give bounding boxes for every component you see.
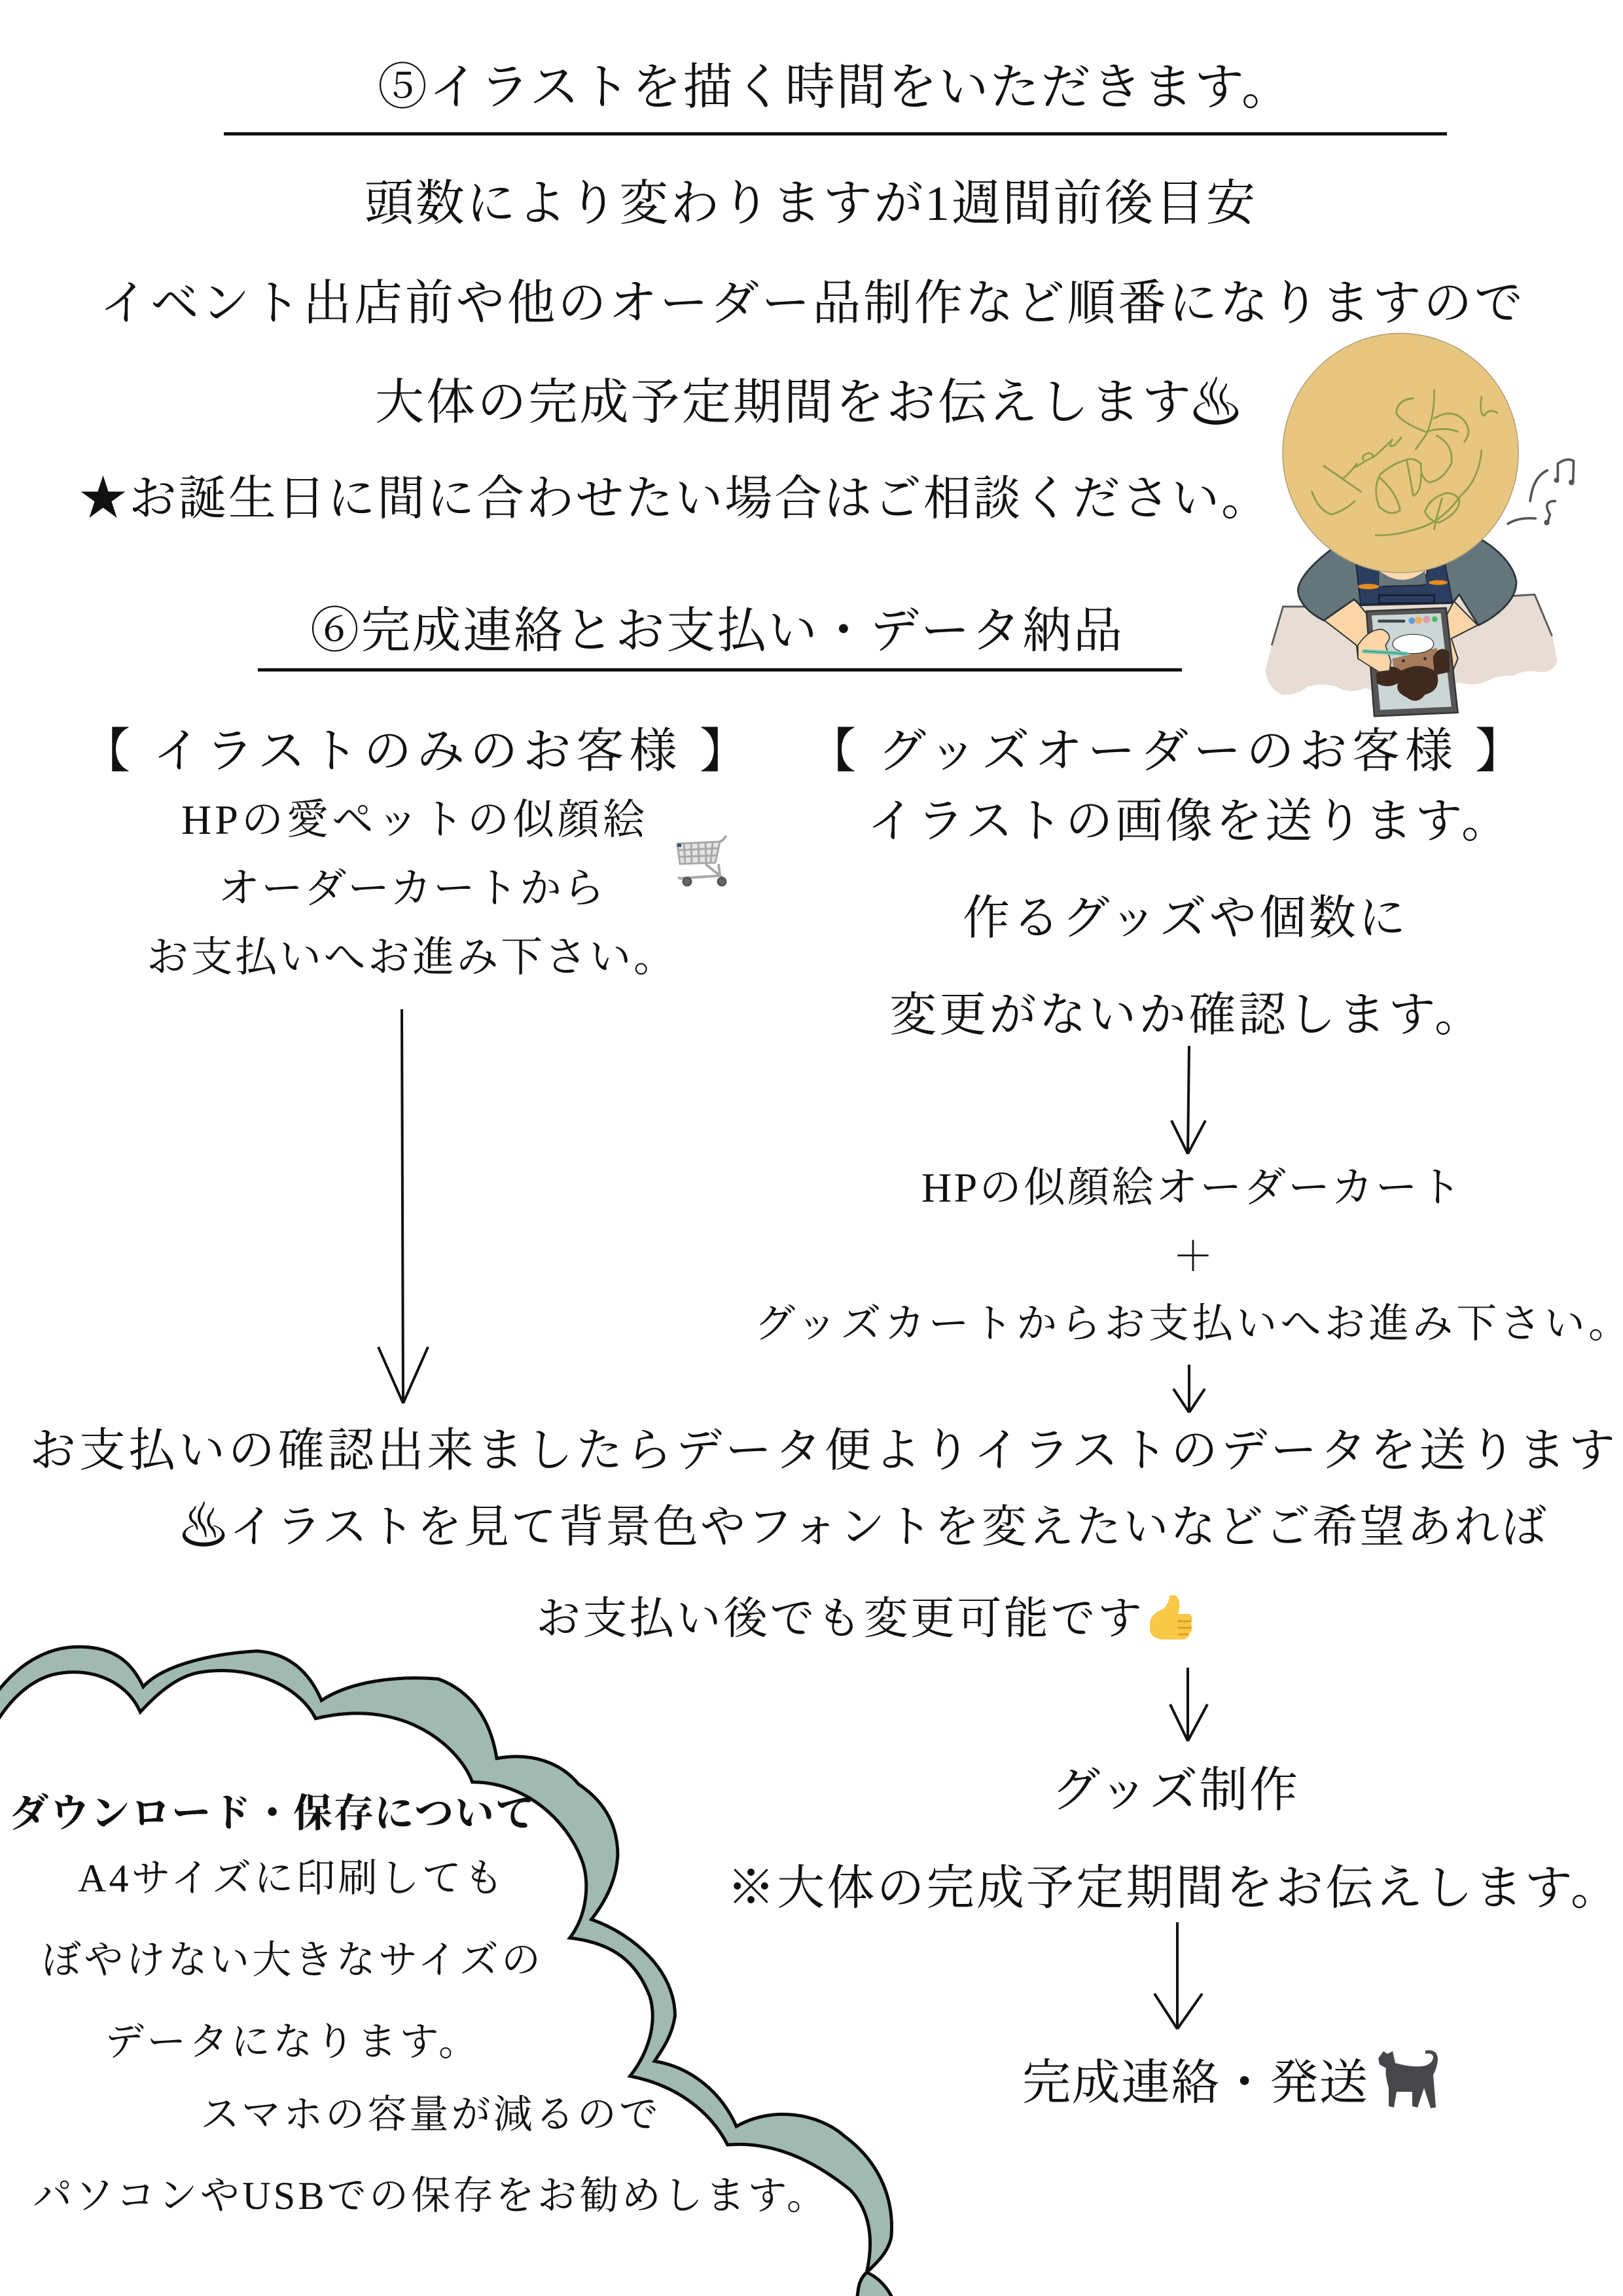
- heading underline: [224, 132, 1447, 135]
- text: completion schedule: 大体の完成予定期間をお伝えします: [375, 376, 1191, 430]
- illustration: artist drawing on tablet: [1266, 333, 1573, 716]
- dog drawing on screen: [1376, 634, 1450, 701]
- section: goods production flow: [727, 1764, 1618, 2110]
- text: goods production: グッズ制作: [1052, 1764, 1298, 1818]
- heading: step 5: ⑤イラストを描く時間をいただきます。: [378, 60, 1291, 115]
- text: data size: データになります。: [105, 2020, 478, 2064]
- text: goods cart: グッズカートからお支払いへお進み下さい。: [755, 1302, 1623, 1346]
- callout heading: ダウンロード・保存について: [9, 1792, 535, 1835]
- text: order of work: イベント出店前や他のオーダー品制作など順番になりますので: [99, 277, 1523, 331]
- icon: thumbs up: [1150, 1595, 1192, 1640]
- column: goods-order customers: [755, 725, 1623, 1412]
- column heading: 【 イラストのみのお客様 】: [82, 725, 747, 778]
- icon: hot spring: ♨: [1187, 365, 1245, 440]
- section 5: illustration time: [79, 60, 1523, 525]
- heading underline: [258, 668, 1182, 672]
- shirt: [1298, 540, 1516, 625]
- text: large size: ぼやけない大きなサイズの: [42, 1939, 541, 1982]
- text: send image: イラストの画像を送ります。: [867, 795, 1508, 848]
- text: goods check 2: 変更がないか確認します。: [889, 989, 1482, 1041]
- text: payment confirmed: お支払いの確認出来ましたらデータ便よりイラストのデータを送ります: [29, 1426, 1615, 1477]
- text: change requests: イラストを見て背景色やフォントを変えたいなどご希望あれば: [229, 1502, 1546, 1552]
- text: changes possible: お支払い後でも変更可能です: [536, 1594, 1142, 1643]
- column: illustration-only customers: [82, 725, 747, 1403]
- pen and hand: [1358, 629, 1406, 672]
- arrow: down to shipping: [1154, 1922, 1202, 2029]
- text: proceed to payment: お支払いへお進み下さい。: [147, 934, 675, 980]
- section 6: completion and payment heading: [258, 604, 1182, 672]
- text: order cart: オーダーカートから: [218, 865, 605, 912]
- desk: [1266, 594, 1558, 695]
- music notes: [1508, 459, 1573, 524]
- text: estimated duration: 頭数により変わりますが1週間前後目安: [365, 177, 1255, 231]
- text: A4 print: A4サイズに印刷しても: [78, 1857, 503, 1900]
- text: phone storage: スマホの容量が減るので: [200, 2093, 658, 2136]
- arrow: down to cart: [1171, 1046, 1205, 1154]
- head: [1283, 333, 1518, 573]
- text: go to cart: HPの愛ペットの似顔絵: [181, 797, 645, 843]
- icon: black cat: [1378, 2051, 1438, 2108]
- text: plus: ＋: [1173, 1235, 1213, 1280]
- arms: [1324, 599, 1478, 675]
- tablet: [1366, 608, 1458, 716]
- text: PC or USB: パソコンやUSBでの保存をお勧めします。: [33, 2174, 826, 2217]
- text: birthday note: ★お誕生日に間に合わせたい場合はご相談ください。: [79, 472, 1269, 525]
- icon: hot spring: ♨: [177, 1490, 230, 1560]
- signature on head: [1312, 390, 1497, 535]
- cloud frame: [0, 1647, 894, 2296]
- heading: step 6: ⑥完成連絡とお支払い・データ納品: [310, 604, 1122, 658]
- arrow: down to payment: [1173, 1365, 1205, 1412]
- column heading: 【 グッズオーダーのお客様 】: [808, 725, 1523, 778]
- arrow: down to goods production: [1170, 1668, 1207, 1741]
- overalls and neck: [1356, 561, 1453, 604]
- text: completion and shipping: 完成連絡・発送: [1022, 2056, 1368, 2110]
- callout: download and save note: [0, 1647, 894, 2296]
- arrow: long down: [378, 1009, 428, 1403]
- text: goods check 1: 作るグッズや個数に: [963, 892, 1406, 944]
- section: data delivery after payment: [29, 1426, 1615, 1741]
- icon: shopping cart: [677, 836, 726, 886]
- text: completion estimate: ※大体の完成予定期間をお伝えします。: [727, 1861, 1618, 1914]
- text: portrait cart: HPの似顔絵オーダーカート: [921, 1164, 1461, 1211]
